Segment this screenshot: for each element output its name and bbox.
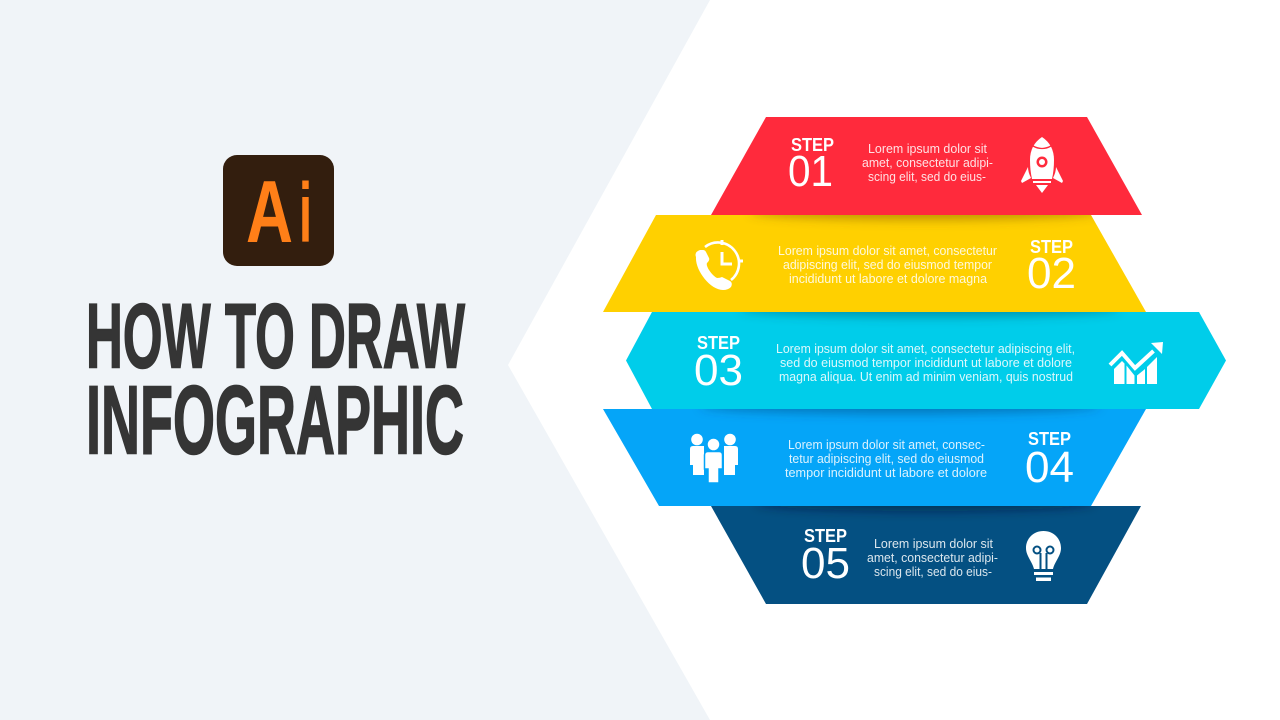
step 04 text: tempor incididunt ut labore et dolore bbox=[785, 466, 987, 480]
step 04 text: tetur adipiscing elit, sed do eiusmod bbox=[789, 452, 984, 466]
step 05 text: scing elit, sed do eius- bbox=[874, 565, 992, 579]
step 02 text: incididunt ut labore et dolore magna bbox=[789, 272, 987, 286]
step 05 text: amet, consectetur adipi- bbox=[867, 551, 998, 565]
step 03 label: STEP bbox=[697, 332, 740, 353]
Adobe Illustrator logo: i bbox=[299, 166, 312, 260]
step 01 label: STEP bbox=[791, 134, 834, 155]
Adobe Illustrator logo: A bbox=[246, 162, 293, 261]
step 03 label: 03 bbox=[694, 346, 743, 395]
step 01 text: amet, consectetur adipi- bbox=[862, 156, 993, 170]
icon: light bulb bbox=[1026, 531, 1061, 581]
step 01 text: scing elit, sed do eius- bbox=[868, 170, 986, 184]
step 02 text: adipiscing elit, sed do eiusmod tempor bbox=[783, 258, 992, 272]
icon: clock and phone bbox=[696, 240, 743, 290]
step 03 text bbox=[776, 342, 1075, 384]
step 01 text bbox=[862, 142, 993, 184]
step 01 text: Lorem ipsum dolor sit bbox=[868, 142, 988, 156]
step 04 text: Lorem ipsum dolor sit amet, consec- bbox=[788, 438, 985, 452]
step 05 label: STEP bbox=[804, 525, 847, 546]
step 01 label: 01 bbox=[788, 147, 833, 196]
step 02 text: Lorem ipsum dolor sit amet, consectetur bbox=[778, 244, 997, 258]
panel: step 01 bbox=[711, 117, 1142, 215]
step 04 text bbox=[785, 438, 987, 480]
panel: step 04 bbox=[603, 409, 1146, 506]
icon: rocket bbox=[1021, 137, 1063, 193]
step 03 text: magna aliqua. Ut enim ad minim veniam, quis nostrud bbox=[779, 370, 1073, 384]
step 03 text: Lorem ipsum dolor sit amet, consectetur adipiscing elit, bbox=[776, 342, 1075, 356]
step 05 label: 05 bbox=[801, 539, 850, 588]
step 04 label: STEP bbox=[1028, 428, 1071, 449]
panel: step 03 bbox=[626, 312, 1226, 409]
step 02 label: 02 bbox=[1027, 249, 1076, 298]
step 05 text bbox=[867, 537, 998, 579]
background panel bbox=[0, 0, 710, 720]
step 02 text bbox=[778, 244, 997, 286]
panel: step 02 bbox=[603, 215, 1146, 312]
icon: people group bbox=[690, 434, 738, 483]
title bbox=[86, 286, 465, 474]
title: HOW TO DRAW bbox=[86, 286, 465, 388]
step 05 text: Lorem ipsum dolor sit bbox=[874, 537, 994, 551]
step 03 text: sed do eiusmod tempor incididunt ut labore et dolore bbox=[780, 356, 1072, 370]
step 04 label: 04 bbox=[1025, 443, 1074, 492]
Adobe Illustrator logo bbox=[223, 155, 334, 266]
icon: growth chart bbox=[1110, 342, 1163, 384]
title: INFOGRAPHIC bbox=[86, 366, 464, 474]
step 02 label: STEP bbox=[1030, 236, 1073, 257]
panel: step 05 bbox=[711, 506, 1141, 604]
